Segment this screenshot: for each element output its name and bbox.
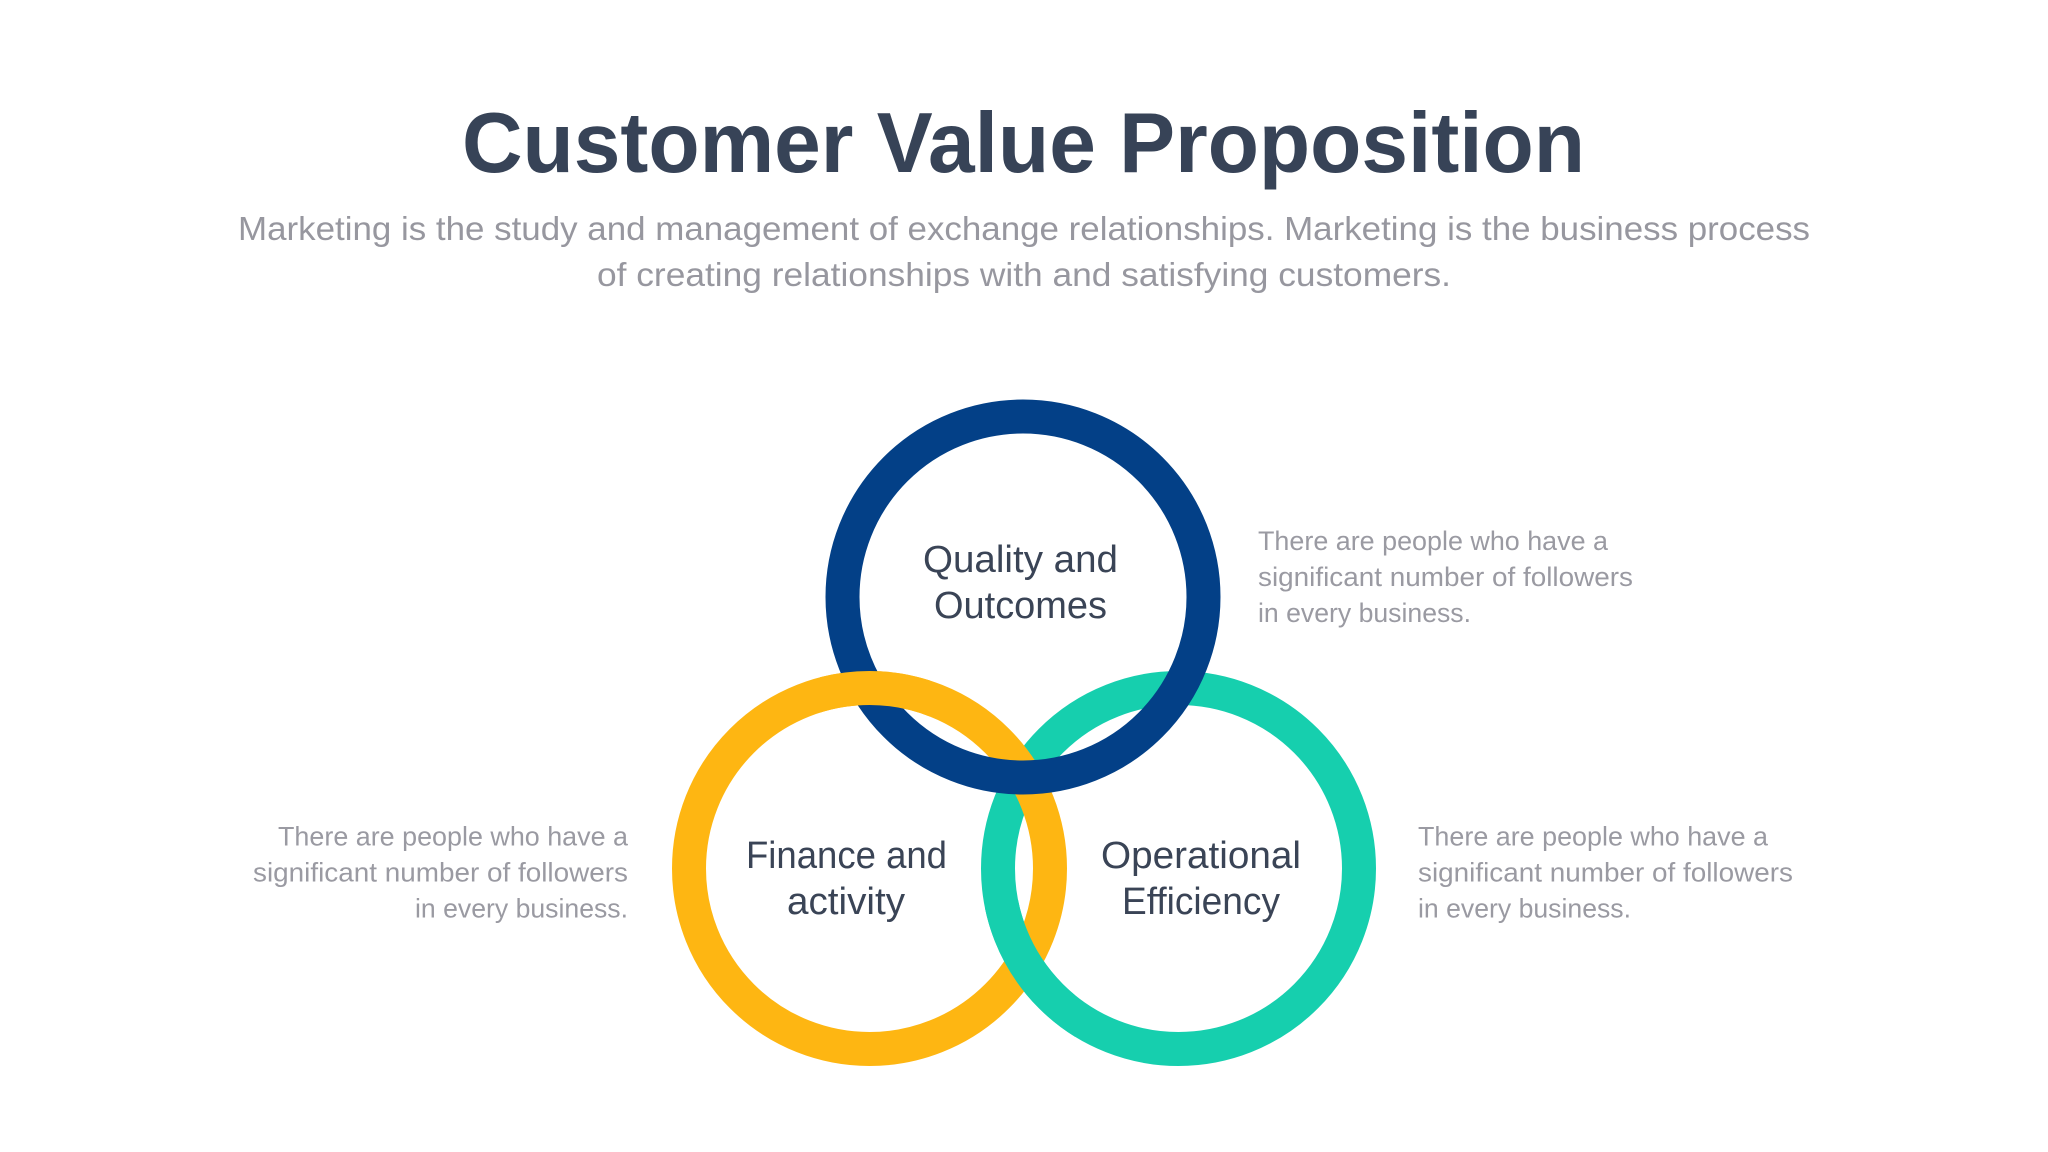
label: quality and outcomes xyxy=(923,539,1118,627)
ring: finance and activity (yellow) xyxy=(689,688,1050,1049)
text block: bottom left xyxy=(253,822,628,924)
label: operational efficiency: Operational xyxy=(1101,835,1301,877)
text block: bottom right xyxy=(1418,822,1793,924)
ring overlap: yellow over blue xyxy=(820,671,930,717)
label: finance and activity: Finance and xyxy=(746,835,947,877)
text block: top right: in every business. xyxy=(1258,598,1471,628)
text block: bottom right: in every business. xyxy=(1418,894,1631,924)
venn diagram: three interlocking rings xyxy=(689,416,1359,1049)
text block: bottom left: significant number of followers xyxy=(253,858,628,888)
text block: top right: There are people who have a xyxy=(1258,526,1608,556)
label: quality and outcomes: Quality and xyxy=(923,539,1118,581)
ring: quality and outcomes (blue) xyxy=(842,416,1204,778)
label: finance and activity xyxy=(746,835,947,923)
label: finance and activity: activity xyxy=(787,881,905,923)
text block: top right: significant number of followers xyxy=(1258,562,1633,592)
label: operational efficiency: Efficiency xyxy=(1122,881,1280,923)
text block: bottom left: There are people who have a xyxy=(278,822,628,852)
subtitle xyxy=(238,210,1810,293)
ring overlap: green over yellow xyxy=(985,900,1075,1037)
text block: bottom right: There are people who have a xyxy=(1418,822,1768,852)
text block: top right xyxy=(1258,526,1633,628)
title: Customer Value Proposition xyxy=(462,96,1585,191)
ring: operational efficiency (green) xyxy=(998,688,1359,1049)
subtitle: of creating relationships with and satisfying customers. xyxy=(597,256,1451,293)
subtitle: Marketing is the study and management of exchange relationships. Marketing is the business process xyxy=(238,210,1810,247)
label: operational efficiency xyxy=(1101,835,1301,923)
text block: bottom left: in every business. xyxy=(415,894,628,924)
text block: bottom right: significant number of followers xyxy=(1418,858,1793,888)
label: quality and outcomes: Outcomes xyxy=(934,585,1107,627)
